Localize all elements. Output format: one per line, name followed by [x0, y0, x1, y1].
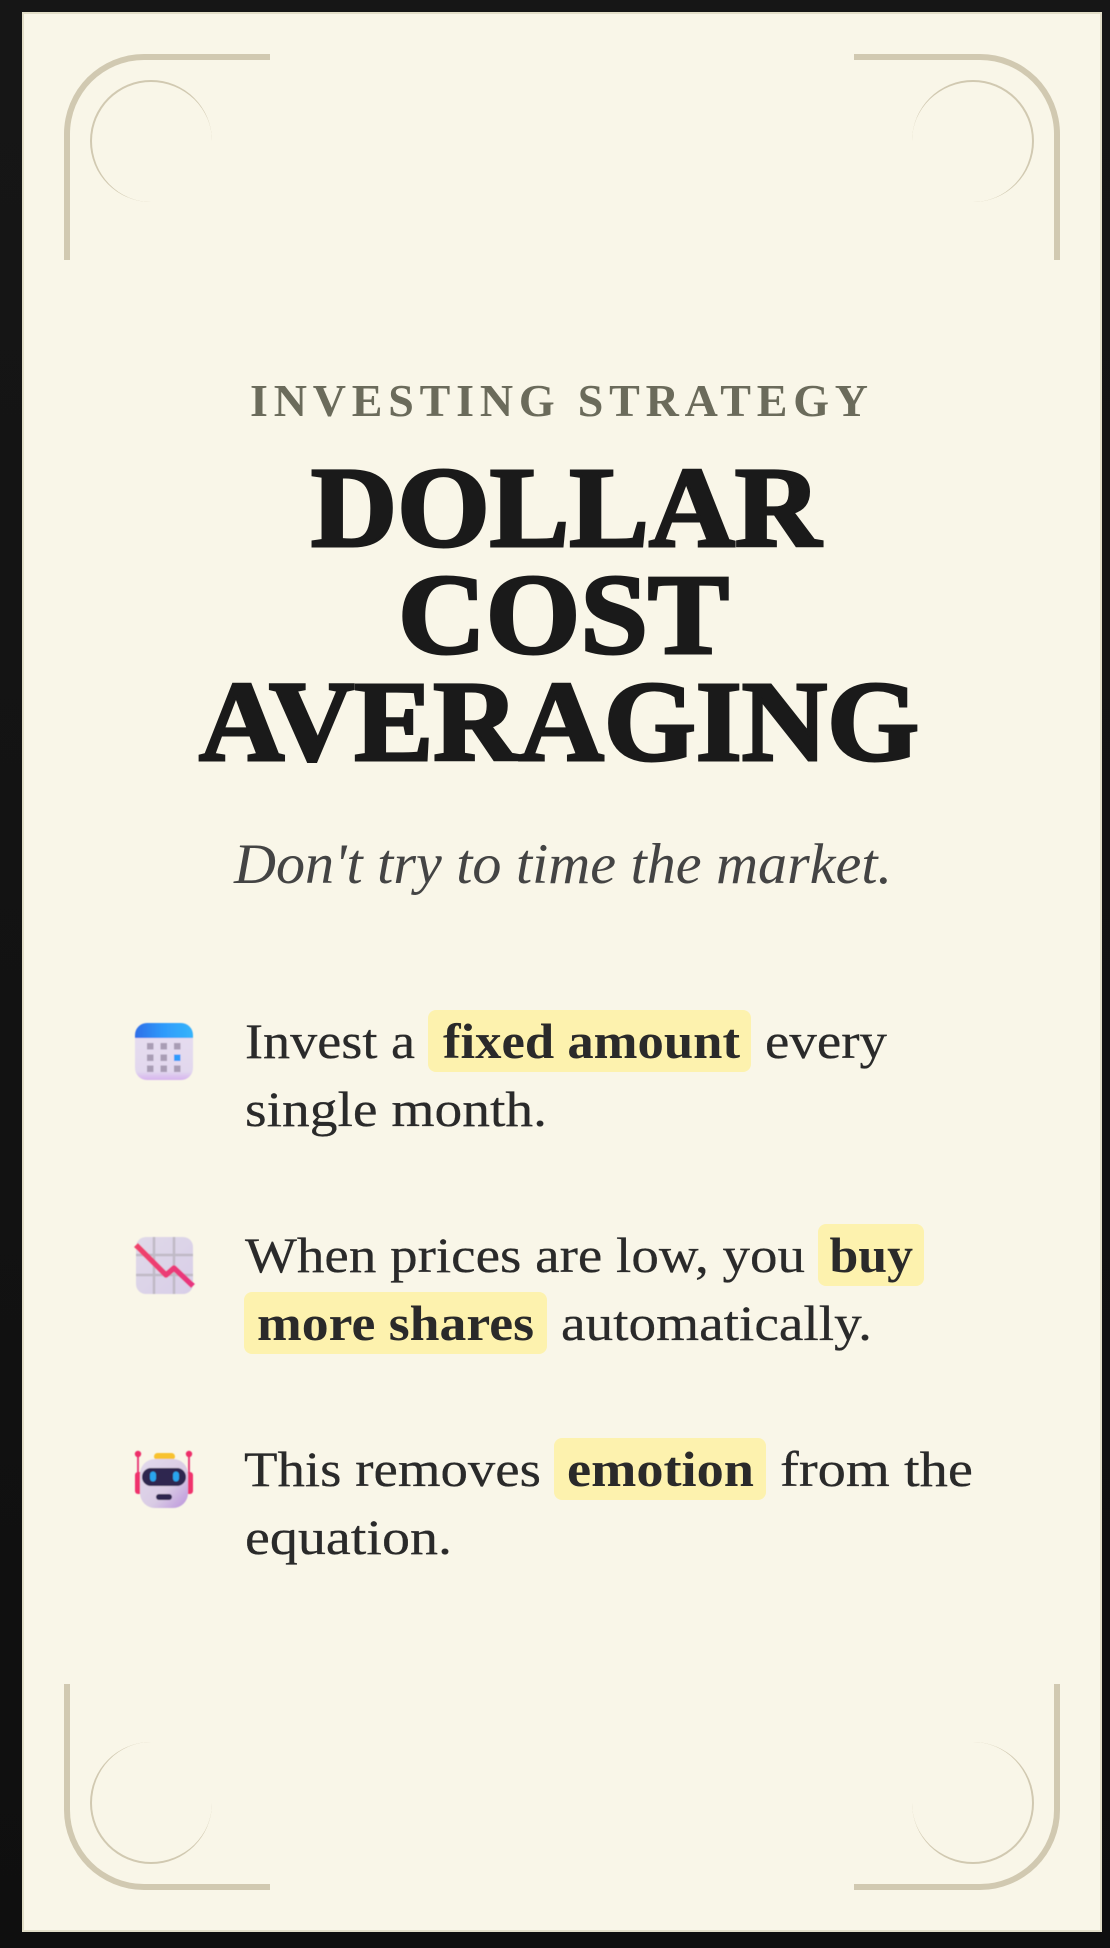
text: item 3: equation.: [245, 1509, 452, 1565]
title: DOLLAR: [311, 444, 823, 571]
title: [199, 444, 919, 785]
text: item 1: every: [765, 1013, 887, 1069]
title: COST: [398, 551, 729, 678]
text: item 2: buy: [830, 1227, 913, 1283]
text: item 2: more shares: [257, 1295, 534, 1351]
corner ornament: bottom left: [64, 1684, 270, 1890]
text: item 1: [245, 1010, 887, 1137]
highlight: more shares: [244, 1292, 547, 1354]
text: item 2: When prices are low, you: [245, 1227, 805, 1283]
highlight: emotion: [554, 1438, 766, 1500]
text: item 2: automatically.: [561, 1295, 872, 1351]
text: item 3: This removes: [244, 1441, 541, 1497]
text: item 1: fixed amount: [443, 1013, 740, 1069]
text: item 1: single month.: [245, 1081, 547, 1137]
corner ornament: top right: [854, 54, 1060, 260]
highlight: fixed amount: [428, 1010, 751, 1072]
text: item 3: emotion: [567, 1441, 754, 1497]
icon: falling chart: [136, 1237, 193, 1294]
corner ornament: top left: [64, 54, 270, 260]
text: item 3: from the: [780, 1441, 973, 1497]
eyebrow label: INVESTING STRATEGY: [250, 375, 868, 426]
subtitle: Don't try to time the market.: [233, 833, 892, 896]
text: item 3: [244, 1438, 973, 1565]
title: AVERAGING: [199, 658, 919, 785]
highlight: buy: [818, 1224, 924, 1286]
corner ornament: bottom right: [854, 1684, 1060, 1890]
text: item 1: Invest a: [245, 1013, 415, 1069]
text: item 2: [244, 1224, 924, 1354]
icon: calendar: [135, 1023, 193, 1080]
icon: robot: [135, 1451, 193, 1508]
